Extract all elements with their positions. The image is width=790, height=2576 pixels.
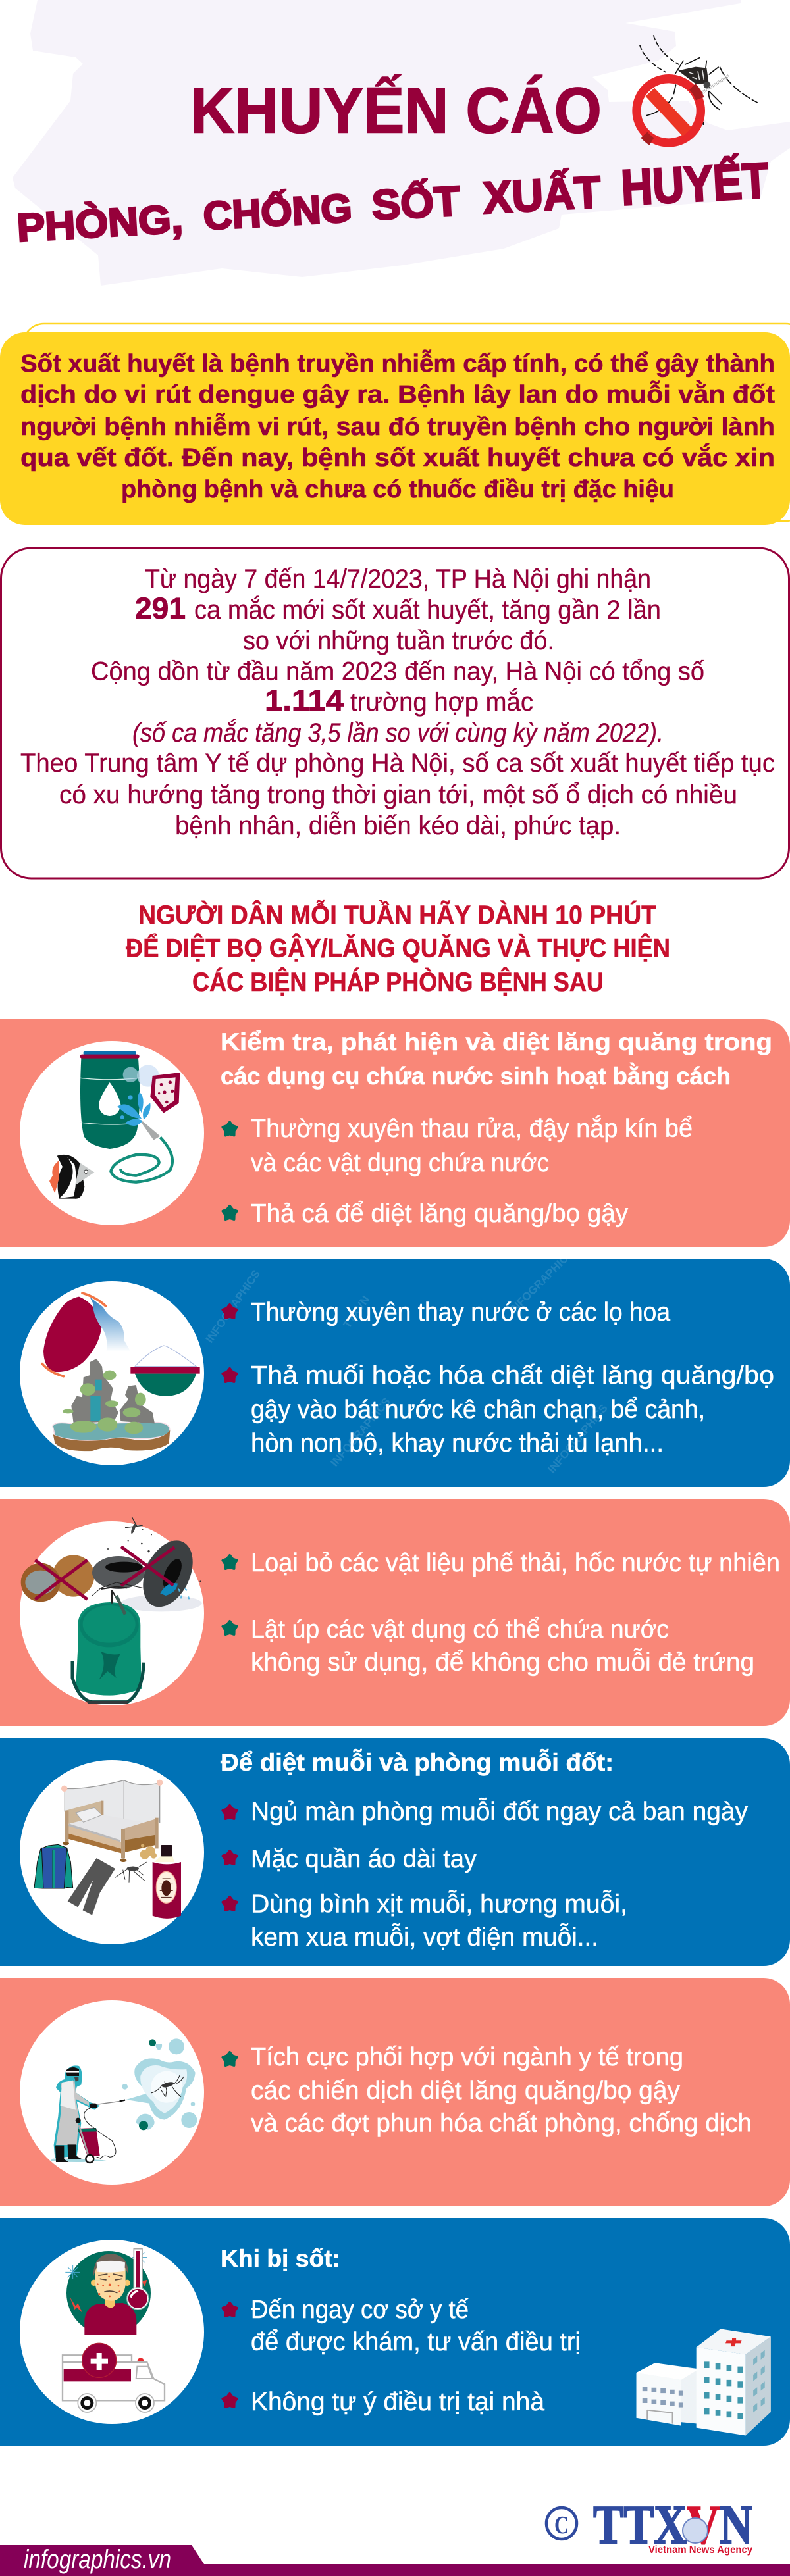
panel: yellow introduction: phòng bệnh và chưa có thuốc điều trị đặc hiệu [121, 476, 674, 503]
bullet [223, 1123, 237, 1135]
panel 4: kill mosquitoes and avoid bites: kem xua muỗi, vợt điện muỗi... [251, 1923, 598, 1952]
bullet [223, 2052, 237, 2065]
icon: bed net, clothes and repellent [34, 1780, 181, 1919]
panel: yellow introduction: dịch do vi rút dengue gây ra. Bệnh lây lan do muỗi vằn đốt [20, 380, 775, 409]
panel 4: kill mosquitoes and avoid bites: Để diệt muỗi và phòng muỗi đốt: [221, 1749, 614, 1776]
bullet [223, 1621, 237, 1634]
icon: hospital buildings [637, 2329, 771, 2436]
panel 1: check and kill larvae: Thả cá để diệt lăng quăng/bọ gậy [251, 1200, 628, 1228]
panel 6: when having a fever: Không tự ý điều trị tại nhà [251, 2388, 544, 2416]
panel 4: kill mosquitoes and avoid bites [0, 1738, 790, 1966]
panel: Hanoi statistics outline box: có xu hướng tăng trong thời gian tới, một số ổ dịch có nhiều [59, 780, 737, 809]
heading: weekly 10 minute call to action: NGƯỜI DÂN MỖI TUẦN HÃY DÀNH 10 PHÚT [138, 899, 656, 930]
bullet [223, 1555, 237, 1569]
heading: weekly 10 minute call to action: ĐỂ DIỆT BỌ GẬY/LĂNG QUĂNG VÀ THỰC HIỆN [126, 932, 670, 963]
panel: Hanoi statistics outline box: so với những tuần trước đó. [243, 626, 554, 655]
panel 5: cooperate with health sector [0, 1978, 790, 2206]
panel: yellow introduction [0, 324, 790, 525]
panel: Hanoi statistics outline box: Từ ngày 7 đến 14/7/2023, TP Hà Nội ghi nhận [145, 565, 651, 593]
bullet [223, 1851, 237, 1864]
bullet [223, 1206, 237, 1219]
icon: water barrel, sponge, hose and fish [49, 1051, 180, 1199]
panel 4: kill mosquitoes and avoid bites: Dùng bình xịt muỗi, hương muỗi, [251, 1890, 627, 1919]
panel 2: change water, add salt: INFOGRAPHICS [506, 1247, 576, 1317]
panel 2: change water, add salt: TTXVN [341, 1294, 372, 1330]
icon: vase, bowl of salt and rock garden [42, 1293, 200, 1451]
panel 5: cooperate with health sector: Tích cực phối hợp với ngành y tế trong [251, 2043, 683, 2071]
footer: TTXVN logo: Vietnam News Agency [648, 2544, 752, 2556]
panel 6: when having a fever: Đến ngay cơ sở y tế [251, 2296, 469, 2324]
panel: yellow introduction: người bệnh nhiễm vi rút, sau đó truyền bệnh cho người lành [20, 412, 775, 441]
heading: weekly 10 minute call to action: CÁC BIỆN PHÁP PHÒNG BỆNH SAU [192, 967, 604, 997]
bullet [223, 1897, 237, 1910]
panel 1: check and kill larvae [0, 1019, 790, 1247]
panel 2: change water, add salt: hòn non bộ, khay nước thải tủ lạnh... [251, 1429, 664, 1457]
panel 2: change water, add salt: INFOGRAPHICS [546, 1402, 610, 1476]
icon: coconut shells, tyres and upturned bucket [21, 1517, 203, 1704]
panel 4: kill mosquitoes and avoid bites: Ngủ màn phòng muỗi đốt ngay cả ban ngày [251, 1798, 748, 1826]
footer: purple bar with site name [0, 2545, 790, 2576]
panel 3: remove waste materials: không sử dụng, để không cho muỗi đẻ trứng [251, 1648, 754, 1677]
title: PHÒNG, CHỐNG SỐT XUẤT HUYẾT [16, 153, 770, 250]
footer: purple bar with site name: infographics.vn [24, 2545, 171, 2574]
title: KHUYẾN CÁO: KHUYẾN CÁO [190, 74, 602, 146]
panel 1: check and kill larvae: Kiểm tra, phát hiện và diệt lăng quăng trong [221, 1028, 772, 1055]
title: PHÒNG, CHỐNG SỐT XUẤT HUYẾT: CHỐNG [202, 186, 353, 238]
panel: yellow introduction: qua vết đốt. Đến nay, bệnh sốt xuất huyết chưa có vắc xin [20, 443, 775, 472]
panel 3: remove waste materials: Lật úp các vật dụng có thể chứa nước [251, 1615, 669, 1644]
panel 2: change water, add salt: INFOGRAPHICS [329, 1396, 393, 1469]
statistic: 1.114: 1.114 [265, 684, 344, 717]
panel: Hanoi statistics outline box: trường hợp mắc [350, 687, 533, 717]
panel 2: change water, add salt: INFOGRAPHICS [203, 1268, 263, 1345]
icon: feverish patient and ambulance [63, 2249, 165, 2412]
title: PHÒNG, CHỐNG SỐT XUẤT HUYẾT: HUYẾT [619, 153, 770, 216]
statistic: 291: 291 [135, 592, 186, 625]
bullet [223, 1369, 237, 1382]
panel: Hanoi statistics outline box: ca mắc mới sốt xuất huyết, tăng gần 2 lần [194, 595, 661, 624]
heading: weekly 10 minute call to action [126, 899, 670, 997]
footer: TTXVN logo: C [554, 2512, 569, 2539]
panel 4: kill mosquitoes and avoid bites: Mặc quần áo dài tay [251, 1845, 477, 1873]
title: PHÒNG, CHỐNG SỐT XUẤT HUYẾT: XUẤT [482, 166, 602, 223]
footer: TTXVN logo: TTXVN [593, 2494, 752, 2556]
panel 2: change water, add salt [0, 1247, 790, 1487]
bullet [223, 2394, 237, 2407]
bullet [223, 1305, 237, 1318]
panel: Hanoi statistics outline box: (số ca mắc tăng 3,5 lần so với cùng kỳ năm 2022). [132, 718, 664, 747]
panel 2: change water, add salt: gậy vào bát nước kê chân chạn, bể cảnh, [251, 1396, 705, 1424]
panel 2: change water, add salt: Thường xuyên thay nước ở các lọ hoa [251, 1298, 670, 1326]
title: PHÒNG, CHỐNG SỐT XUẤT HUYẾT: SỐT [371, 177, 461, 229]
panel: Hanoi statistics outline box: bệnh nhân, diễn biến kéo dài, phức tạp. [175, 811, 621, 840]
panel 3: remove waste materials: Loại bỏ các vật liệu phế thải, hốc nước tự nhiên [251, 1549, 780, 1577]
panel 1: check and kill larvae: các dụng cụ chứa nước sinh hoạt bằng cách [221, 1062, 731, 1090]
panel: Hanoi statistics outline box: Theo Trung tâm Y tế dự phòng Hà Nội, số ca sốt xuất huyết tiếp tục [20, 749, 775, 778]
panel 6: when having a fever: Khi bị sốt: [221, 2245, 340, 2272]
panel: Hanoi statistics outline box [1, 548, 789, 878]
panel 5: cooperate with health sector: và các đợt phun hóa chất phòng, chống dịch [251, 2109, 752, 2137]
panel 1: check and kill larvae: Thường xuyên thau rửa, đậy nắp kín bể [251, 1115, 693, 1143]
panel 1: check and kill larvae: và các vật dụng chứa nước [251, 1149, 549, 1177]
icon: mosquito with prohibition sign [637, 35, 758, 143]
panel 2: change water, add salt: Thả muối hoặc hóa chất diệt lăng quăng/bọ [251, 1361, 774, 1390]
panel: yellow introduction: Sốt xuất huyết là bệnh truyền nhiễm cấp tính, có thể gây thành [20, 349, 775, 378]
title background brush shape [13, 0, 790, 286]
panel: Hanoi statistics outline box: Cộng dồn từ đầu năm 2023 đến nay, Hà Nội có tổng số [91, 657, 704, 686]
bullet [223, 2303, 237, 2316]
title: PHÒNG, CHỐNG SỐT XUẤT HUYẾT: PHÒNG, [16, 197, 184, 250]
icon: worker spraying mosquito [51, 2038, 197, 2163]
panel 3: remove waste materials [0, 1499, 790, 1726]
bullet [223, 1806, 237, 1819]
panel 6: when having a fever [0, 2218, 790, 2446]
panel 5: cooperate with health sector: các chiến dịch diệt lăng quăng/bọ gậy [251, 2077, 680, 2105]
panel 6: when having a fever: để được khám, tư vấn điều trị [251, 2328, 581, 2356]
